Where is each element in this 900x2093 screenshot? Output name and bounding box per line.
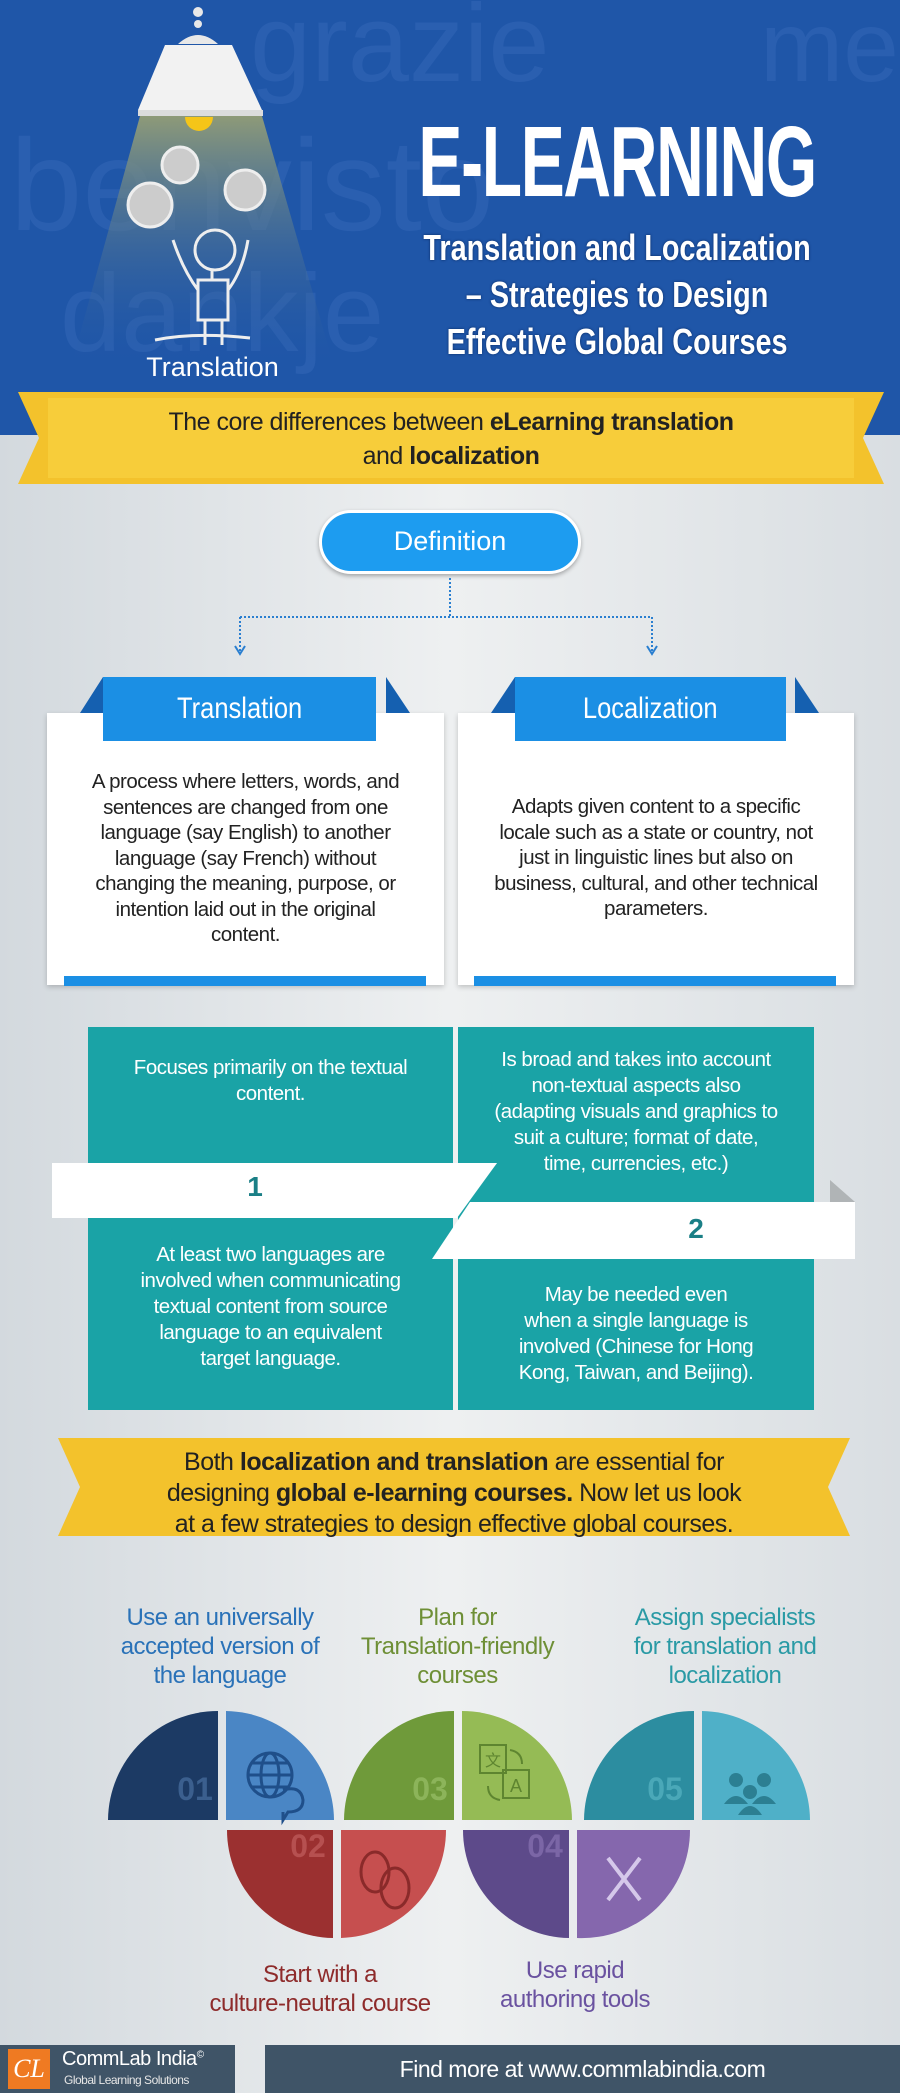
text: parameters. [604, 897, 708, 920]
text: two languages: language to an equivalent [159, 1321, 382, 1344]
strategy label 04: authoring tools [500, 1986, 650, 2013]
05 [584, 1711, 810, 1820]
text: localization broad: non-textual aspects also [531, 1074, 741, 1097]
text: intention laid out in the original [116, 898, 375, 920]
strategy heading 05: Assign specialists [635, 1604, 815, 1631]
text: single language: involved (Chinese for Hong [519, 1335, 753, 1358]
03: A [510, 1776, 522, 1796]
tab: Translation: Translation [177, 692, 302, 725]
text: localization broad [494, 1048, 778, 1175]
text: translation focus [134, 1056, 407, 1105]
strategy label 04 [500, 1957, 650, 2013]
text: localization broad: Is broad and takes into account [501, 1048, 771, 1071]
strategy label 04: Use rapid [526, 1957, 624, 1984]
banner: essential: designing global e-learning courses. Now let us look [167, 1479, 741, 1507]
banner: essential: at a few strategies to design effective global courses. [175, 1510, 733, 1538]
text: single language: May be needed even [545, 1283, 727, 1306]
02 [227, 1828, 446, 1938]
strategy heading 05: localization [669, 1662, 781, 1689]
text: content. [211, 923, 280, 946]
text: single language: Kong, Taiwan, and Beijing). [519, 1361, 753, 1384]
strategy label 02 [209, 1961, 431, 2017]
arrows: dotted connectors [234, 578, 658, 656]
text: two languages: target language. [200, 1347, 341, 1370]
tab: Translation [103, 677, 376, 741]
03: 03 [412, 1771, 448, 1807]
04 [463, 1828, 690, 1938]
footer link [265, 2045, 900, 2093]
strategy heading 01: the language [154, 1662, 286, 1689]
03: 文 [485, 1752, 501, 1770]
text: two languages [140, 1243, 400, 1370]
text: localization broad: time, currencies, etc.) [544, 1152, 728, 1175]
tab: Localization: Localization [583, 692, 718, 725]
text: localization broad: (adapting visuals and graphics to [494, 1100, 778, 1123]
text [92, 770, 399, 946]
banner: core differences [18, 392, 884, 484]
pill: Definition [319, 510, 581, 574]
icon: lamp and light cone [90, 7, 312, 345]
text: just in linguistic lines but also on [519, 846, 793, 869]
text: two languages: textual content from source [154, 1295, 387, 1318]
text: Adapts given content to a specific [512, 795, 800, 818]
panel: Localization definition [456, 677, 856, 990]
04: 04 [527, 1828, 563, 1864]
strategy heading 03: Translation-friendly [361, 1633, 554, 1660]
strategy heading 03 [361, 1604, 554, 1689]
text: locale such as a state or country, not [499, 820, 813, 844]
background words: benvisto [10, 112, 494, 258]
strategy heading 05 [634, 1604, 816, 1689]
comparison grid [52, 1027, 855, 1410]
05: 05 [647, 1771, 683, 1807]
footer link: Find more at www.commlabindia.com [400, 2056, 765, 2082]
subtitle [422, 227, 811, 362]
strategy heading 01: Use an universally [126, 1604, 314, 1631]
text: sentences are changed from one [103, 796, 388, 818]
text: localization broad: suit a culture; format of date, [514, 1126, 758, 1149]
logo: CL [13, 2054, 45, 2083]
text [494, 795, 818, 920]
strategy heading 01: accepted version of [121, 1633, 319, 1660]
01: 01 [177, 1771, 213, 1807]
strategy heading 05: for translation and [634, 1633, 816, 1660]
subtitle: – Strategies to Design [466, 274, 768, 315]
text: language (say French) without [115, 846, 376, 870]
label: Translation: Translation [146, 352, 279, 382]
subtitle: Effective Global Courses [447, 321, 787, 362]
footer [0, 2045, 900, 2093]
logo [0, 2045, 235, 2093]
text: single language [519, 1283, 753, 1384]
title: E-LEARNING: E-LEARNING [418, 106, 816, 218]
text: two languages: involved when communicating [140, 1269, 400, 1292]
strategy label 02: Start with a [263, 1961, 377, 1988]
strategy heading 03: courses [417, 1662, 498, 1689]
subtitle: Translation and Localization [423, 227, 811, 268]
banner: core differences: The core differences between eLearning translation [168, 408, 734, 436]
number 1: 1 [247, 1171, 263, 1202]
text: business, cultural, and other technical [494, 872, 818, 894]
number 2: 2 [688, 1213, 704, 1244]
ribbons 1 and 2 [52, 1163, 855, 1259]
text: A process where letters, words, and [92, 770, 399, 793]
chart: strategy semicircles [108, 1711, 810, 1938]
text: changing the meaning, purpose, or [95, 872, 396, 895]
text: translation focus: content. [236, 1082, 305, 1105]
logo: CommLab India© [62, 2048, 204, 2070]
tab: Localization [515, 677, 786, 741]
background words [10, 0, 899, 375]
text: language (say English) to another [100, 821, 391, 844]
header panel [0, 0, 900, 435]
strategy heading 01 [121, 1604, 320, 1689]
02: 02 [290, 1828, 326, 1864]
banner: essential [58, 1438, 850, 1538]
pill: Definition: Definition [394, 526, 506, 556]
text: two languages: At least two languages are [156, 1243, 385, 1266]
panel: Translation definition [44, 677, 446, 990]
logo: Global Learning Solutions [64, 2073, 189, 2087]
banner: core differences: and localization [363, 442, 539, 470]
banner: essential: Both localization and translation are essential for [184, 1448, 724, 1476]
strategy heading 03: Plan for [418, 1604, 497, 1631]
03 [344, 1711, 572, 1820]
text: translation focus: Focuses primarily on the textual [134, 1056, 407, 1079]
background words: dankje [60, 252, 384, 375]
01 [108, 1711, 334, 1820]
strategy label 02: culture-neutral course [209, 1990, 431, 2017]
text: single language: when a single language is [524, 1309, 748, 1332]
